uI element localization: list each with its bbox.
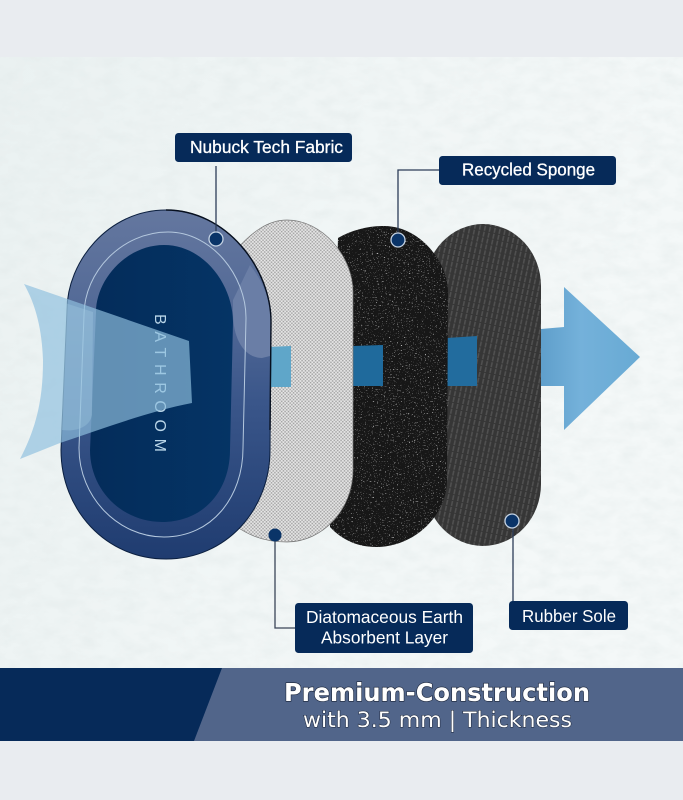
label: Rubber Sole bbox=[509, 601, 628, 630]
mat centre panel bbox=[90, 245, 233, 522]
moisture square on diatomaceous layer bbox=[268, 346, 291, 387]
textured paper panel bbox=[0, 57, 683, 668]
moisture square on rubber sole bbox=[447, 336, 477, 386]
beam overlap patch bbox=[62, 303, 93, 430]
mat top-right highlight bbox=[233, 265, 271, 358]
bottom banner bbox=[0, 668, 683, 741]
banner heading: Premium-Construction bbox=[284, 678, 590, 707]
label: Recycled Sponge: Recycled Sponge bbox=[462, 160, 595, 180]
label: Diatomaceous Earth Absorbent Layer: Absorbent Layer bbox=[321, 628, 448, 648]
label: Recycled Sponge bbox=[439, 156, 616, 185]
layer: nubuck tech fabric mat bbox=[61, 210, 271, 559]
label: Nubuck Tech Fabric bbox=[175, 133, 352, 162]
mat inner line bbox=[79, 232, 246, 537]
banner slate block bbox=[194, 668, 683, 741]
label: Diatomaceous Earth Absorbent Layer bbox=[295, 603, 473, 653]
layer: rubber sole bbox=[425, 224, 541, 546]
banner dark block bbox=[0, 668, 683, 741]
banner subheading: with 3.5 mm | Thickness bbox=[303, 708, 572, 733]
mat label: BATHROOM bbox=[151, 314, 168, 452]
label: Rubber Sole: Rubber Sole bbox=[522, 606, 616, 626]
moisture square on sponge bbox=[353, 345, 383, 386]
connector: nubuck bbox=[209, 166, 223, 246]
mat rim bbox=[61, 210, 271, 559]
layer: diatomaceous earth bbox=[236, 220, 353, 542]
label: Diatomaceous Earth Absorbent Layer: Diatomaceous Earth bbox=[306, 607, 463, 627]
connector: recycled sponge bbox=[391, 170, 439, 247]
mat dark edge bbox=[166, 210, 271, 430]
layer: recycled sponge bbox=[330, 226, 448, 547]
label: Nubuck Tech Fabric: Nubuck Tech Fabric bbox=[190, 137, 343, 157]
connector: diatomaceous earth bbox=[268, 528, 295, 628]
arrow: moisture exit bbox=[541, 287, 640, 430]
connector: rubber sole bbox=[505, 514, 519, 601]
arrow: moisture entry beam bbox=[20, 284, 192, 459]
